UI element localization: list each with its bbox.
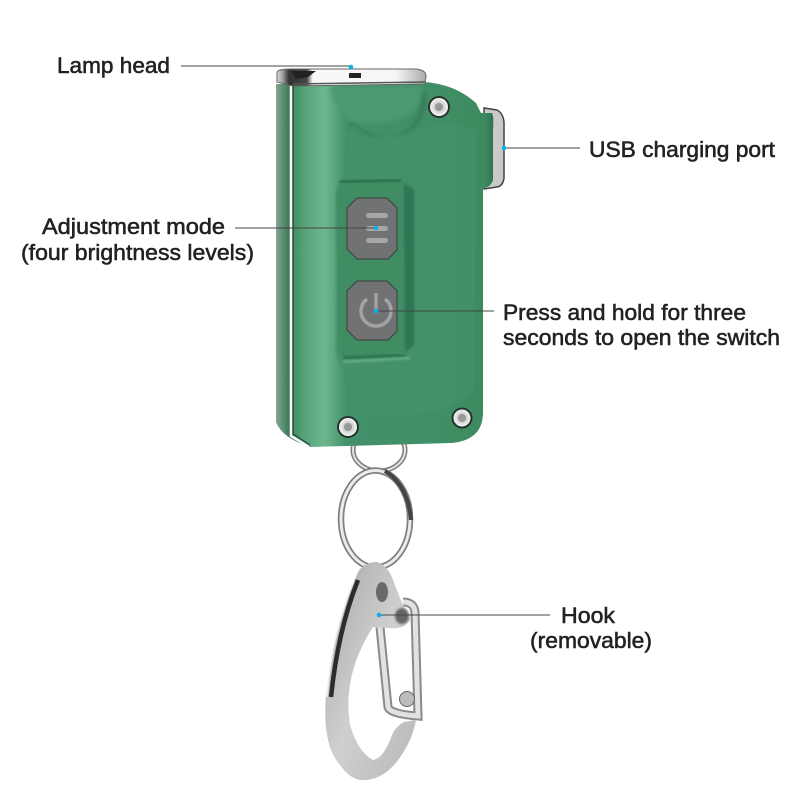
callout: USB charging port (502, 137, 775, 162)
power button (347, 281, 397, 340)
callout: power switch: seconds to open the switch (503, 325, 780, 350)
hook rivet hole (376, 582, 388, 602)
callout: power switch (374, 300, 780, 350)
USB charging port (484, 108, 504, 189)
callout: hook (377, 603, 652, 653)
wire gate (380, 602, 418, 716)
callout: hook: Hook (561, 603, 616, 628)
callout: USB charging port: USB charging port (589, 137, 775, 162)
lamp head (277, 69, 426, 86)
raised plate (336, 124, 476, 416)
adjustment button (347, 198, 397, 259)
hook frame (325, 562, 416, 780)
hook dark edge (331, 580, 358, 697)
callout: adjustment mode: Adjustment mode (42, 214, 225, 239)
large key ring (341, 470, 411, 568)
flashlight body (276, 69, 504, 447)
screws (337, 96, 472, 438)
callout: power switch: Press and hold for three (503, 300, 746, 325)
callout: adjustment mode: (four brightness levels) (21, 240, 254, 265)
front panel (292, 82, 493, 447)
callout: hook: (removable) (530, 628, 652, 653)
hook plate shadow (395, 608, 409, 624)
callout: adjustment mode (21, 214, 378, 265)
side band (276, 84, 310, 447)
callout: lamp head: Lamp head (57, 53, 170, 78)
metal edge strip (291, 86, 309, 447)
carabiner hook (325, 562, 418, 780)
button recess (336, 180, 414, 359)
upper scoop shadow (350, 86, 425, 138)
small key ring (353, 429, 405, 471)
gate ball (400, 692, 414, 706)
callout: lamp head (57, 53, 353, 78)
